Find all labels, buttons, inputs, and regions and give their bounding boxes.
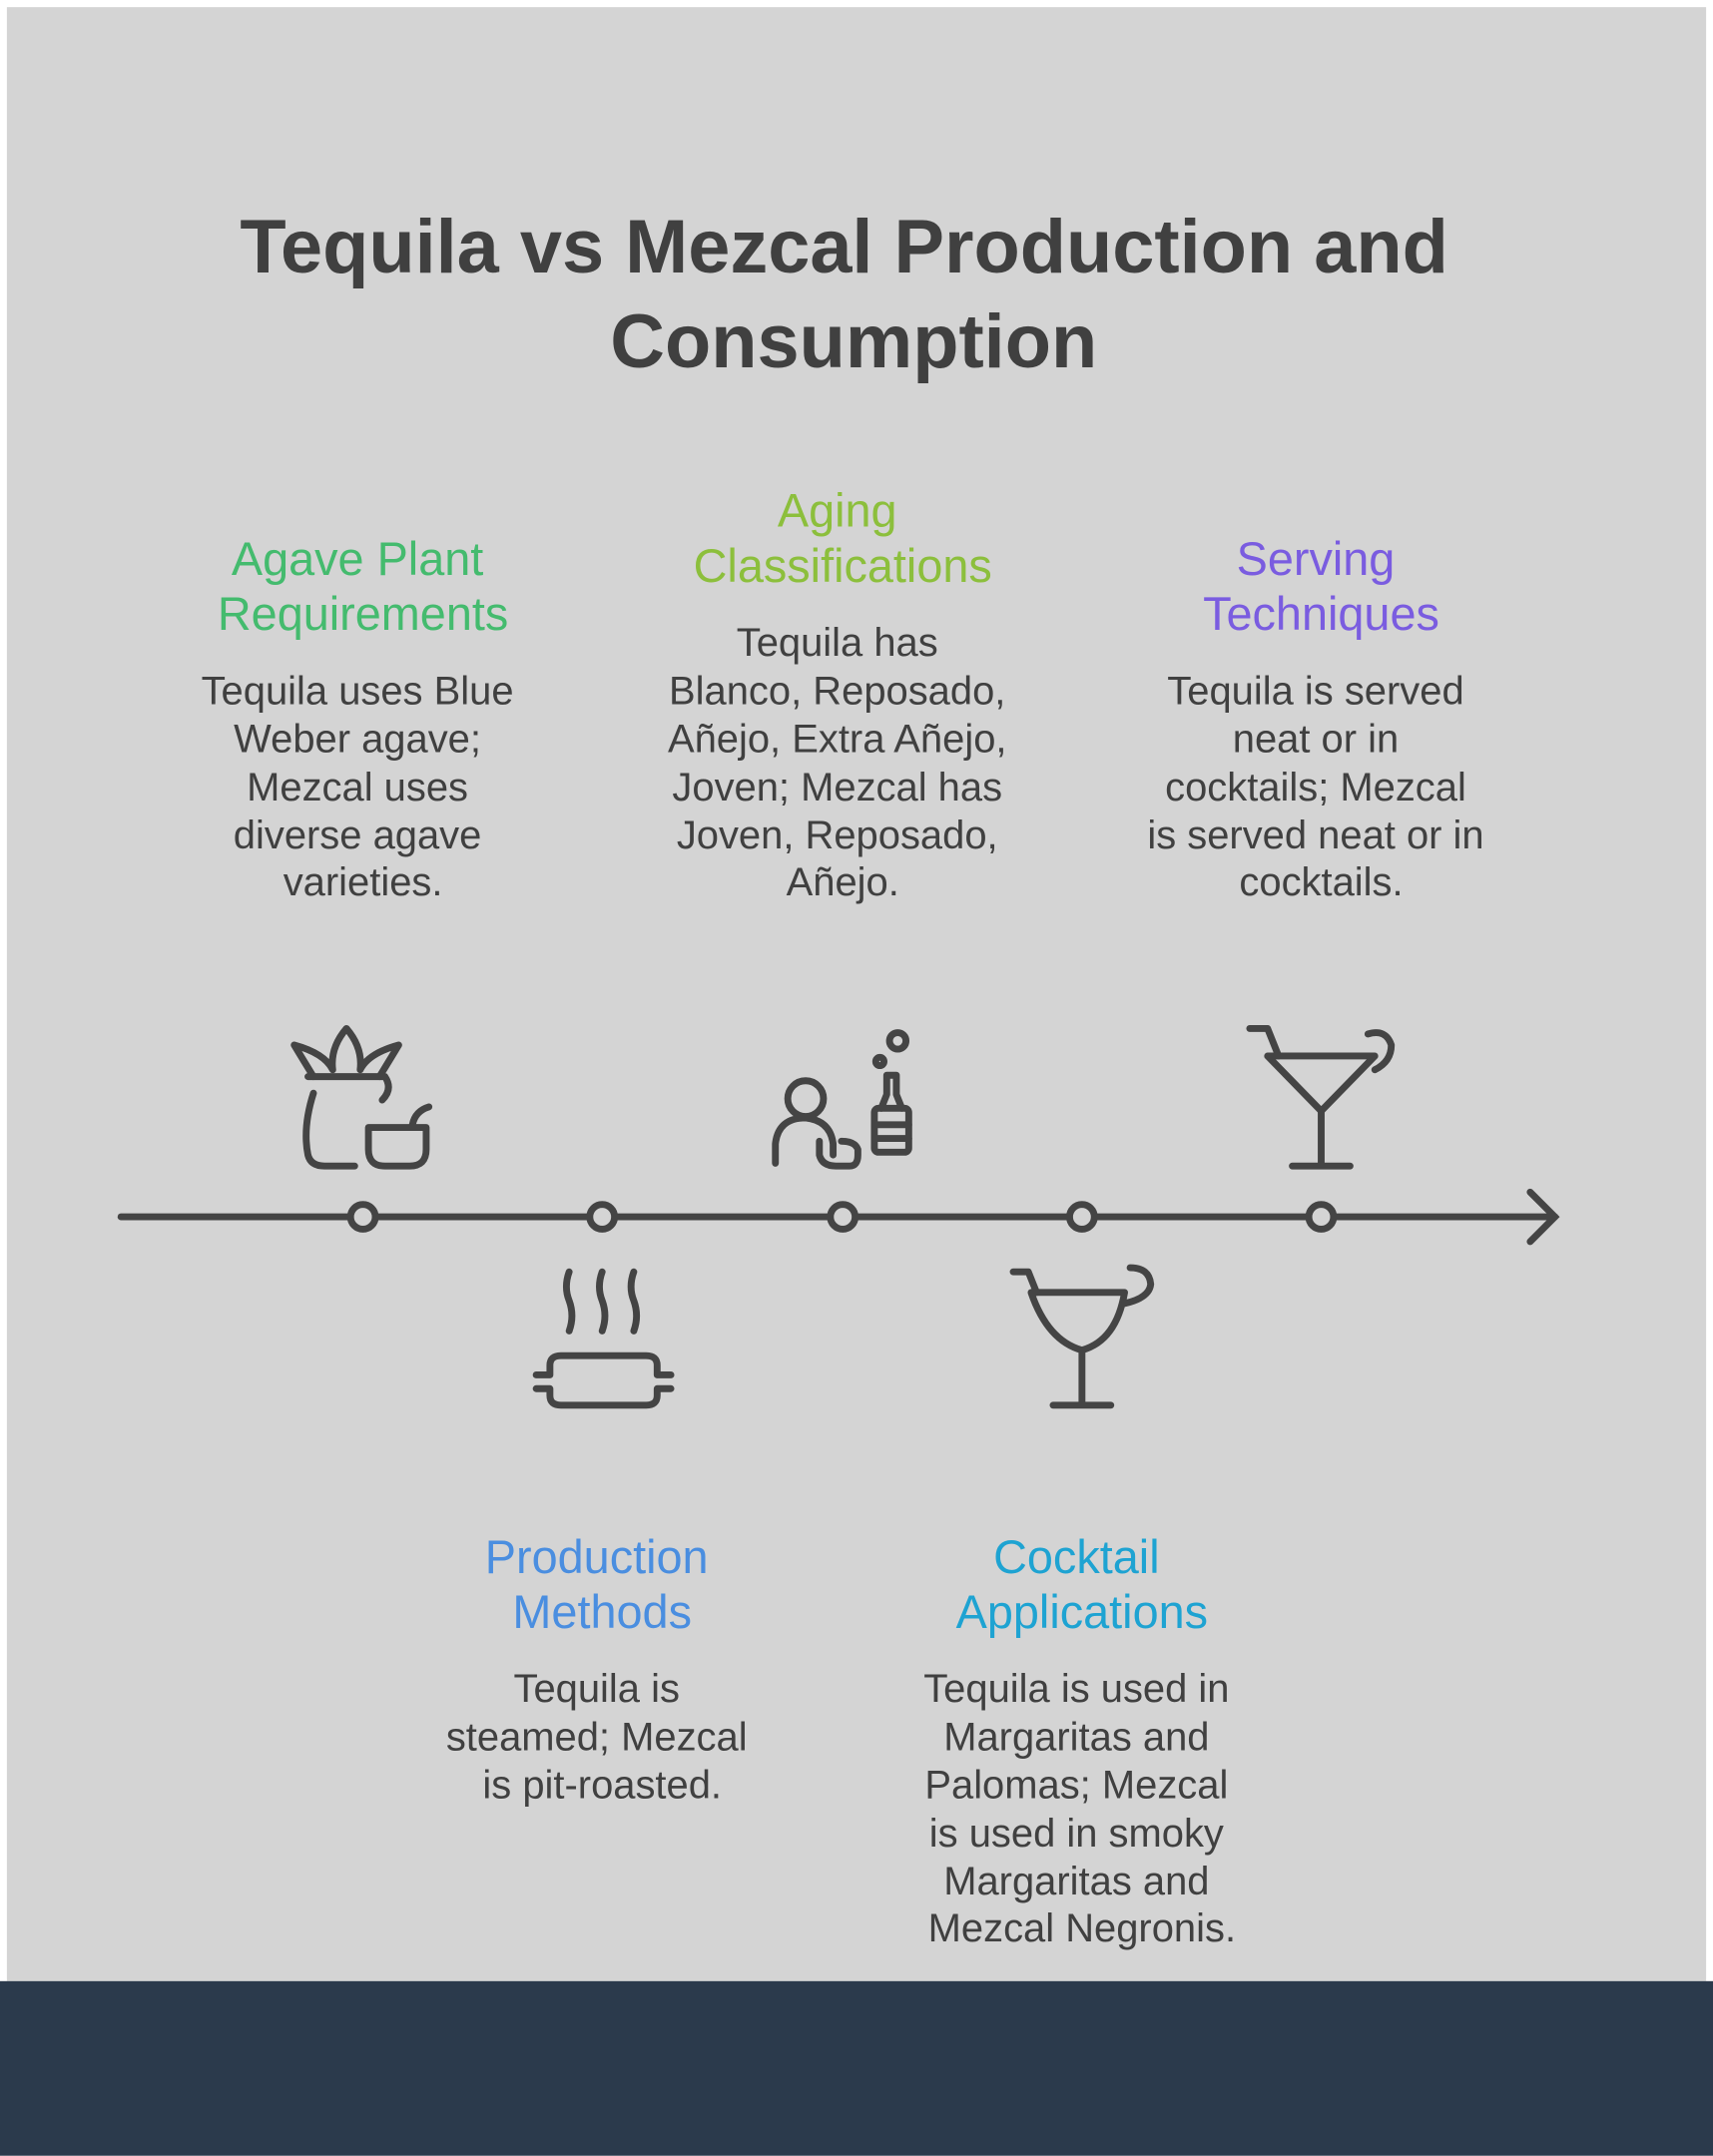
- text: aging: [668, 621, 1007, 904]
- text: cocktail: Palomas; Mezcal: [924, 1764, 1228, 1808]
- panel: cocktail applications: [923, 1531, 1236, 1950]
- footer bar: [0, 1981, 1713, 2156]
- text: aging: Blanco, Reposado,: [669, 669, 1005, 713]
- heading: cocktail: Applications: [956, 1586, 1208, 1638]
- panel: agave plant requirements: [202, 533, 514, 904]
- heading: serving: [1203, 533, 1439, 640]
- text: cocktail: Tequila is used in: [923, 1667, 1229, 1711]
- text: agave: diverse agave: [234, 813, 481, 857]
- text: cocktail: [923, 1667, 1236, 1950]
- heading: cocktail: Cocktail: [993, 1531, 1160, 1583]
- text: serving: is served neat or in: [1147, 813, 1484, 857]
- text: aging: Joven; Mezcal has: [672, 766, 1002, 809]
- text: cocktail: is used in smoky: [929, 1812, 1224, 1856]
- text: agave: varieties.: [284, 860, 442, 904]
- text: serving: neat or in: [1233, 718, 1399, 762]
- text: aging: Añejo, Extra Añejo,: [668, 718, 1007, 762]
- text: agave: Mezcal uses: [247, 766, 468, 809]
- heading: aging: [694, 485, 992, 592]
- heading: agave: [218, 533, 508, 640]
- text: agave: [202, 669, 514, 904]
- icon: steaming pot: [536, 1272, 671, 1405]
- text: agave: Tequila uses Blue: [202, 669, 514, 713]
- text: aging: Tequila has: [737, 621, 938, 665]
- icon: martini glass: [1250, 1028, 1392, 1166]
- heading: serving: Serving: [1237, 533, 1395, 585]
- heading: production: Production: [485, 1531, 709, 1583]
- panel: aging classifications: [668, 485, 1007, 904]
- text: production: is pit-roasted.: [482, 1764, 722, 1808]
- text: cocktail: Mezcal Negronis.: [928, 1906, 1236, 1950]
- text: production: Tequila is: [513, 1667, 680, 1711]
- text: aging: Añejo.: [787, 860, 899, 904]
- heading: aging: Classifications: [694, 540, 992, 592]
- text: serving: cocktails.: [1239, 860, 1404, 904]
- text: cocktail: Margaritas and: [943, 1715, 1209, 1759]
- text: serving: [1147, 669, 1484, 904]
- title: Consumption: [610, 299, 1097, 384]
- heading: aging: Aging: [778, 485, 897, 537]
- heading: production: [485, 1531, 709, 1638]
- heading: cocktail: [956, 1531, 1208, 1638]
- title: Tequila vs Mezcal Production and: [240, 205, 1448, 289]
- text: cocktail: Margaritas and: [943, 1860, 1209, 1903]
- heading: agave: Agave Plant: [232, 533, 483, 585]
- heading: production: Methods: [512, 1586, 692, 1638]
- text: production: steamed; Mezcal: [446, 1715, 748, 1759]
- text: production: [446, 1667, 748, 1808]
- text: agave: Weber agave;: [234, 718, 481, 762]
- panel: production methods: [446, 1531, 748, 1808]
- panel: serving techniques: [1147, 533, 1484, 904]
- timeline arrow: [121, 1192, 1555, 1242]
- heading: serving: Techniques: [1203, 588, 1439, 640]
- icon: cocktail glass: [1013, 1268, 1151, 1405]
- text: serving: cocktails; Mezcal: [1165, 766, 1466, 809]
- text: aging: Joven, Reposado,: [677, 813, 998, 857]
- heading: agave: Requirements: [218, 588, 508, 640]
- title: [240, 205, 1448, 384]
- icon: person with bottle: [776, 1033, 908, 1166]
- text: serving: Tequila is served: [1167, 669, 1464, 713]
- icon: agave plant: [294, 1028, 429, 1166]
